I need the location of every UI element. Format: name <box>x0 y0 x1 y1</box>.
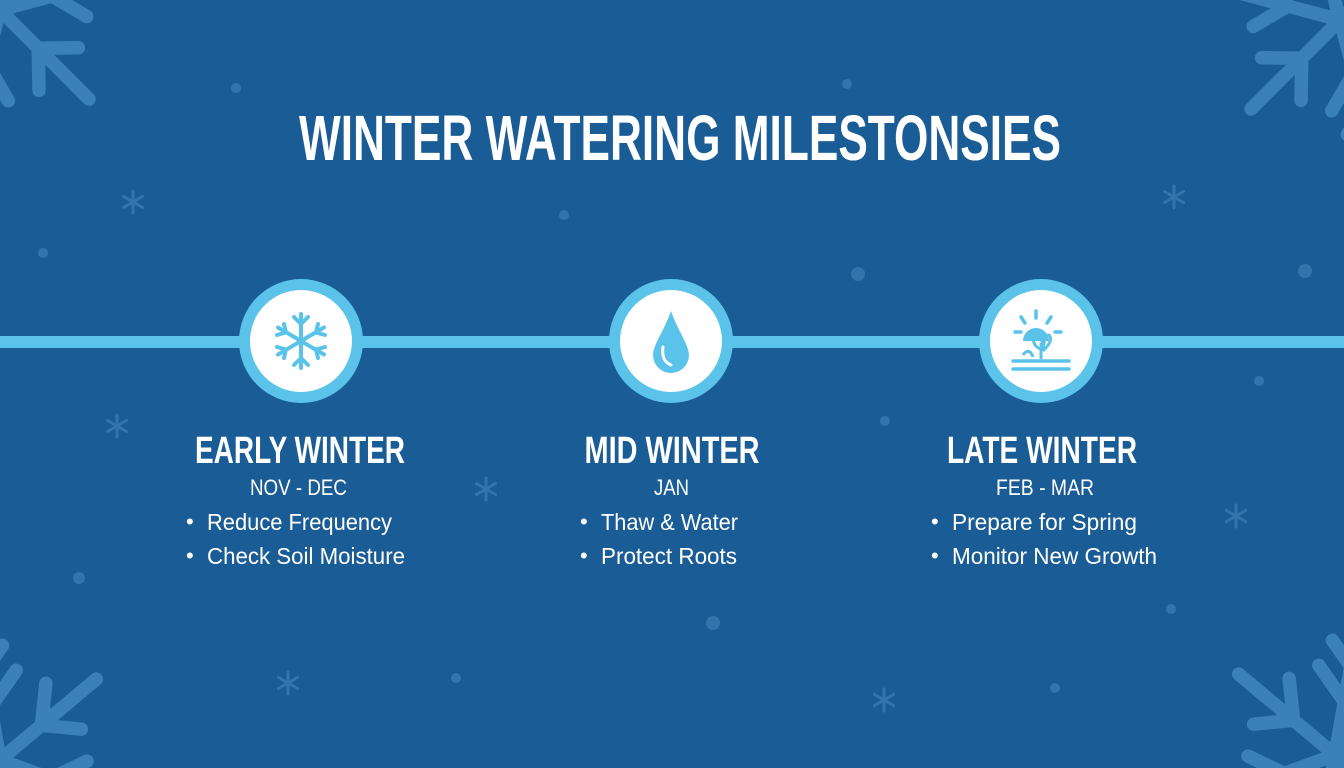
column: mid winter: JAN <box>654 475 689 500</box>
milestone icon: snowflake <box>239 279 363 403</box>
milestone icon: sun and sprout <box>979 279 1103 403</box>
column: late winter: LATE WINTER <box>947 430 1137 472</box>
column: early winter: • <box>186 509 194 534</box>
column: mid winter: Protect Roots <box>601 543 737 569</box>
column: mid winter: • <box>580 543 588 568</box>
timeline line <box>0 336 1344 348</box>
background dots and small flakes <box>38 79 1312 711</box>
column: early winter: • <box>186 543 194 568</box>
column: late winter: • <box>931 543 939 568</box>
column: mid winter: MID WINTER <box>584 430 760 472</box>
column: early winter: Check Soil Moisture <box>207 543 405 569</box>
column: early winter <box>186 430 405 569</box>
column: mid winter: Thaw & Water <box>601 509 738 535</box>
column: early winter: EARLY WINTER <box>195 430 405 472</box>
milestone icon: water drop <box>609 279 733 403</box>
column: early winter: NOV - DEC <box>250 475 347 500</box>
column: early winter: Reduce Frequency <box>207 509 392 535</box>
column: late winter: FEB - MAR <box>996 475 1094 500</box>
column: late winter: Prepare for Spring <box>952 509 1137 535</box>
column: late winter: Monitor New Growth <box>952 543 1157 569</box>
column: mid winter: • <box>580 509 588 534</box>
column: mid winter <box>580 430 760 569</box>
column: late winter: • <box>931 509 939 534</box>
column: late winter <box>931 430 1157 569</box>
